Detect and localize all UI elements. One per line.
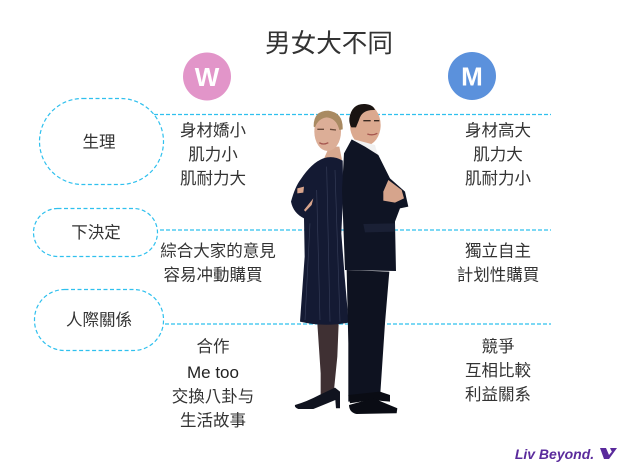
men: physiology: 肌力大	[473, 145, 523, 164]
photo: woman and man back to back	[291, 104, 408, 414]
men: relationships: 互相比較	[465, 361, 532, 380]
men: relationships	[465, 337, 532, 404]
man	[342, 104, 408, 414]
icon: M badge: M	[461, 62, 483, 92]
women: decisions: 綜合大家的意見	[160, 242, 276, 260]
women: relationships: Me too	[187, 363, 239, 382]
row label: 人際關係	[34, 290, 164, 350]
men: physiology: 肌耐力小	[465, 169, 532, 188]
icon: W badge: W	[195, 62, 220, 92]
women: physiology: 身材嬌小	[180, 121, 246, 140]
men: relationships: 利益關系	[465, 385, 531, 404]
row label: 下決定	[34, 208, 158, 256]
men: physiology	[465, 121, 532, 188]
women: relationships: 生活故事	[180, 411, 246, 430]
men: decisions	[457, 242, 539, 284]
women: decisions: 容易冲動購買	[164, 266, 262, 284]
men: relationships: 競爭	[482, 337, 514, 356]
row label: 生理: 生理	[82, 132, 116, 152]
row label: 生理	[40, 98, 164, 184]
women: relationships	[172, 337, 254, 430]
title: 男女大不同	[265, 29, 393, 58]
men: decisions: 獨立自主	[465, 242, 531, 260]
women: relationships: 交換八卦与	[172, 387, 254, 406]
women: physiology: 肌力小	[188, 145, 238, 164]
logo: Liv Beyond: Liv Beyond.	[515, 446, 594, 462]
woman	[291, 111, 349, 409]
icon: W badge	[183, 52, 231, 100]
men: physiology: 身材高大	[465, 121, 531, 140]
row label: 人際關係: 人際關係	[66, 310, 132, 330]
women: physiology: 肌耐力大	[180, 169, 246, 188]
women: decisions	[160, 242, 276, 284]
icon: M badge	[448, 52, 496, 100]
women: physiology	[180, 121, 246, 188]
row label: 下決定: 下決定	[71, 223, 121, 242]
women: relationships: 合作	[196, 337, 230, 356]
men: decisions: 計划性購買	[457, 266, 539, 284]
